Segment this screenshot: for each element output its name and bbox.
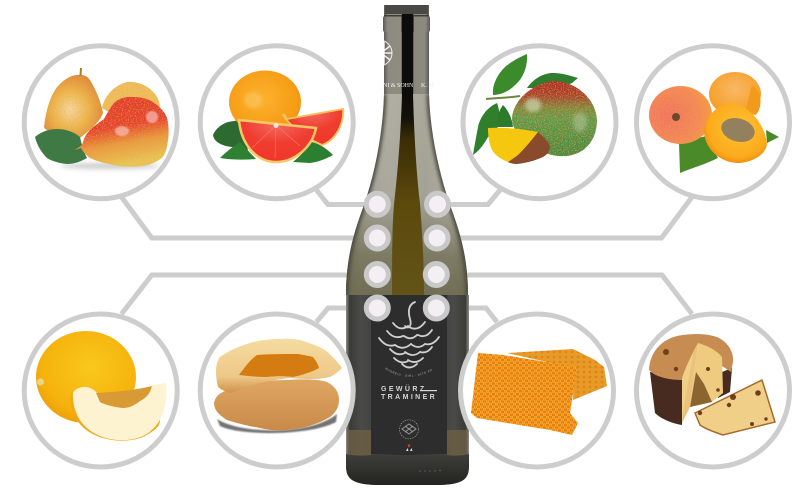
- marker: honeycomb: [425, 297, 447, 319]
- marker: melon: [366, 264, 388, 286]
- cookie shadow: [217, 414, 337, 433]
- leaf: [679, 136, 718, 173]
- circle: panettone: [636, 314, 790, 467]
- comb back: [507, 349, 607, 400]
- wine name: [381, 384, 437, 401]
- slice flesh: [73, 383, 167, 440]
- leaf right: [527, 73, 578, 88]
- glass tint right: [447, 430, 467, 462]
- slice segments: [252, 125, 300, 158]
- circle: honeycomb: [460, 314, 614, 467]
- apricot half: [704, 103, 767, 163]
- base dots: [419, 470, 441, 472]
- glass tint left: [348, 430, 371, 462]
- stone: [719, 114, 757, 146]
- mango whole: [512, 81, 597, 156]
- marker: panettone: [425, 264, 447, 286]
- olive tint: [346, 192, 468, 295]
- apricot red: [649, 86, 712, 144]
- apricot back: [709, 72, 761, 116]
- rear slice: [283, 109, 343, 145]
- circle: mango: [463, 46, 616, 199]
- circle: melon: [24, 314, 177, 467]
- glass edge shading: [346, 94, 468, 296]
- capsule text: NI & SOHN: [383, 83, 414, 89]
- marker: apricot: [426, 227, 448, 249]
- bottle shoulder glass: [346, 94, 468, 296]
- leaf top: [493, 54, 527, 95]
- melon whole: [36, 331, 136, 423]
- shadow: [60, 163, 160, 169]
- capsule top: [385, 5, 428, 14]
- wine band: [392, 94, 424, 296]
- label emblem: [400, 420, 418, 439]
- connector: mango: [440, 190, 500, 204]
- branch: [486, 96, 520, 99]
- label red mark: [406, 444, 412, 451]
- marker: mango: [426, 193, 448, 215]
- whole orange: [229, 70, 301, 134]
- wine name: GEWÜRZ: [381, 384, 427, 393]
- jam filling: [239, 354, 319, 377]
- raisins: [663, 349, 768, 426]
- circle: apricots: [636, 46, 790, 199]
- cut interior: [682, 343, 698, 423]
- mango slice skin: [508, 132, 550, 164]
- melon end: [37, 378, 44, 386]
- highlight: [146, 111, 158, 123]
- comb front: [471, 353, 578, 435]
- slice rind: [71, 391, 160, 441]
- capsule emblem: [384, 40, 392, 66]
- slice: [695, 380, 775, 435]
- grape logo: [379, 302, 439, 368]
- hotspot markers: [366, 193, 448, 319]
- pear red: [75, 97, 169, 167]
- marker: cookie: [366, 297, 388, 319]
- connector: grapefruit: [316, 190, 372, 204]
- capsule ridge: [383, 16, 430, 32]
- dome: [649, 334, 733, 380]
- pear back: [102, 82, 160, 125]
- paper case: [650, 372, 682, 425]
- circle: cookie: [200, 314, 353, 467]
- connector: cookie: [316, 308, 372, 322]
- seeds: [96, 386, 152, 408]
- lower dark glass: [346, 295, 469, 485]
- capsule ridge lines: [384, 15, 429, 16]
- connector: pears: [122, 197, 372, 238]
- wine bottle: [346, 5, 469, 485]
- connector: honeycomb: [440, 308, 497, 322]
- circle: grapefruit: [200, 46, 353, 199]
- connector: apricot: [440, 197, 692, 238]
- connector: melon: [122, 275, 372, 314]
- leaf lower left: [473, 103, 500, 155]
- label: [371, 295, 447, 454]
- foil capsule: [384, 5, 429, 94]
- pear stem: [80, 68, 82, 76]
- cut right face: [690, 343, 723, 407]
- leaf: [35, 129, 87, 164]
- circle: pears: [24, 46, 177, 199]
- leaf lower middle: [497, 105, 513, 127]
- bottom cookie: [214, 379, 339, 430]
- front slice: [239, 120, 316, 162]
- wine bottle: K. M: [421, 83, 434, 89]
- leaves: [213, 120, 248, 150]
- wine name: TRAMINER: [381, 394, 437, 401]
- bottle base: [346, 454, 469, 485]
- marker: grapefruit: [366, 193, 388, 215]
- marker: pears: [366, 227, 388, 249]
- connector lines: [122, 190, 692, 322]
- mango slice flesh: [488, 128, 538, 162]
- label subtitle: MAGREID · GIRL · ALTO ADIGE: [385, 368, 432, 377]
- top cookie: [216, 339, 342, 393]
- connector: panettone: [440, 275, 692, 314]
- pear left: [44, 75, 103, 138]
